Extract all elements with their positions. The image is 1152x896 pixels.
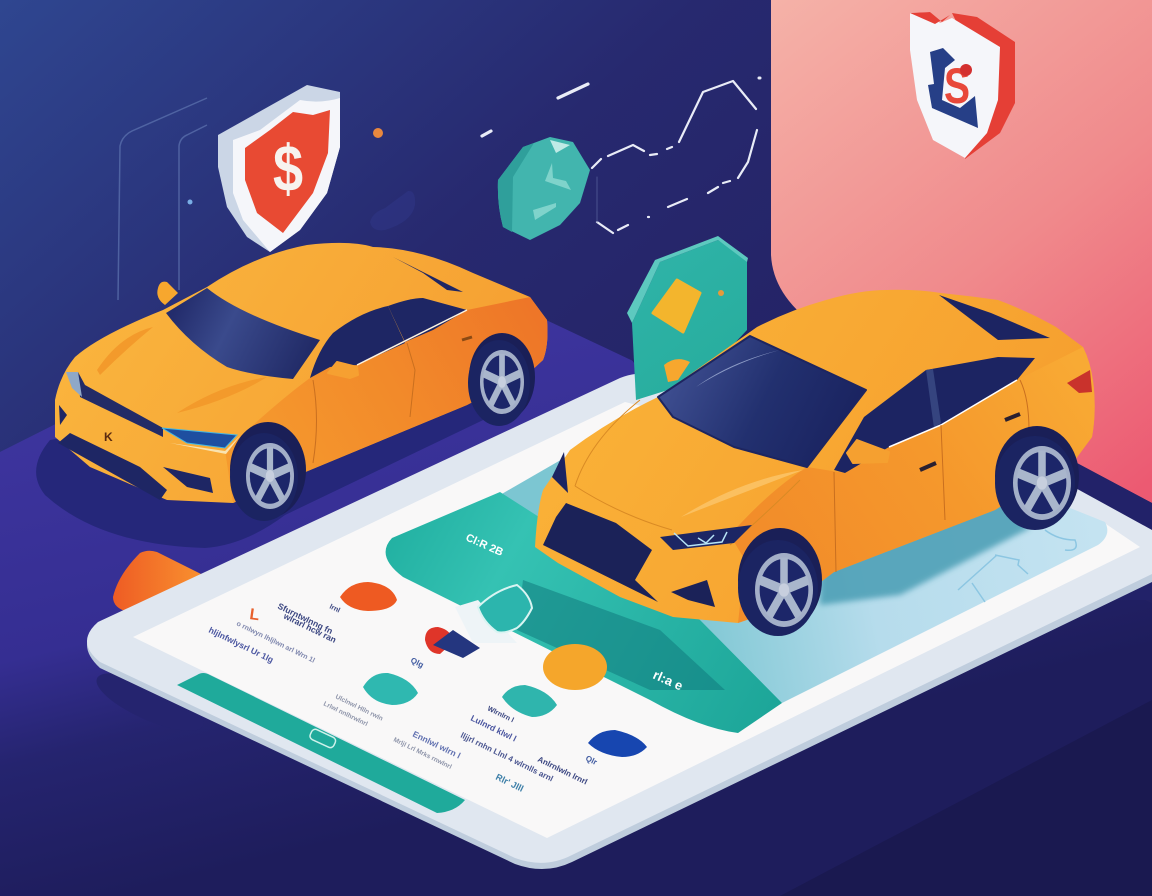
list text: Anlrnlwln lrnrl [536,755,589,787]
teal hexagon badge [498,137,590,240]
icon: red pill [340,582,397,611]
side window rear [388,298,467,342]
rear strip [393,257,463,292]
tag body [632,240,747,400]
list text: Qlr [584,754,598,767]
icon: teal pill a [363,673,418,705]
star dot [718,290,724,296]
window sill [357,310,467,365]
headlight [660,525,752,550]
window sill [889,380,1017,447]
door handles [920,414,1020,470]
icon: blue badge [588,730,647,757]
teal reflection [517,580,725,690]
grille [543,503,658,602]
faint blob [370,191,415,230]
line chart dashes [482,78,760,233]
shield white face [910,12,1000,158]
list text: Mrljl Lrl Mrks rnwlnrl [392,737,453,771]
windshield [166,288,320,379]
icon: glass shield [455,585,532,643]
list text: lrnl [328,604,341,615]
tablet screen [133,402,1140,838]
list text: Lrlwl nnlhrwlnrl [322,701,369,728]
tablet [87,373,1152,869]
door lines [834,380,1029,572]
shield red tip [910,12,950,24]
shield front [233,98,340,252]
left headlight [552,452,568,493]
shield left [218,85,340,252]
logo knob [960,64,972,76]
grille strip [78,372,163,437]
list text: hljlnfwlysrl Ur 1lg [207,625,275,665]
door lines [313,343,415,463]
list text: o rnlwyn lhljlwn arl Wrn 1l [235,621,316,665]
teal panel [386,492,782,733]
logo S: S [944,57,970,114]
side panel [225,297,548,503]
lower grille [58,433,167,500]
front wheel arch [738,528,822,632]
front wheel [738,540,818,636]
front wheel arch [230,422,306,518]
left car shadow [36,370,525,548]
headlight lights [674,532,727,546]
windshield [658,336,866,467]
rear wheel [995,436,1075,530]
letter mark: L [248,606,261,624]
rear wheel arch [469,333,535,421]
tablet shadow [90,662,210,742]
home button [309,728,337,749]
tablet body [87,373,1152,863]
door handle [462,337,472,340]
side vent [59,405,67,425]
navy floor behind tablet right [632,315,1152,600]
gold icon [653,280,700,332]
tag edge [627,236,748,323]
side window front [310,306,405,378]
floor lower-right shade [780,700,1152,896]
dollar sign: $ [273,131,303,205]
shield red face [245,110,330,233]
right car shadow [820,490,1030,605]
rear wheel arch [995,426,1079,526]
list text: Ennlwl wlrn l [411,729,462,761]
shield back [218,85,340,252]
mirror [847,440,889,463]
icon: teal pill b [502,685,557,717]
fog lamp [671,580,715,607]
dots [188,128,383,204]
map lines [958,530,1076,602]
left car [55,243,548,521]
hood creases [97,327,267,413]
list text: Qlg [409,656,425,670]
windshield glare [696,350,780,387]
logo navy [928,48,978,128]
side panel [730,347,1095,623]
list text: Lulnrd klwl l [469,713,518,744]
teal tag behind car [627,236,748,400]
far mirror [157,282,178,305]
fog lamp [163,467,213,493]
teal lower text: rl:a e [651,667,685,693]
pillar [926,369,941,428]
list text [207,601,598,794]
headlight [162,428,237,448]
tablet lip [87,376,1152,869]
shield red back [952,13,1015,159]
logo: K [104,430,113,444]
list text: lljjrl rnhn Llnl 4 wlrnlls arnl [459,731,555,783]
mirror [328,362,358,378]
far mirror [664,359,690,382]
icon: orange circle [543,644,607,690]
floor [0,251,1152,896]
icon: red navy badge [425,627,480,658]
shield right [910,12,1015,159]
front wheel [230,433,298,521]
body [55,243,548,503]
hood line [575,400,800,545]
side window [834,357,1035,473]
list text: Rlr' Jlll [494,772,525,794]
map tray [500,420,1107,703]
body [535,290,1095,623]
left headlight [66,372,82,397]
list text: Ulclnwl Hlln rwln [334,694,384,723]
rear strip [939,295,1050,340]
teal bottom bar [177,673,465,813]
rear light [1067,370,1092,393]
list text: wlrarl hcw ran [281,610,338,645]
hood crease [681,470,803,517]
orange tag [113,551,203,612]
headlight trim [170,436,240,454]
right car [535,290,1095,636]
pink wall panel [771,0,1152,503]
rear wheel [468,340,530,426]
list text: Sfurntwlnng fn [276,601,334,636]
teal header text: Cl:R 2B [464,532,505,559]
list text: Wlrnlrn l [486,706,515,724]
glass frame lines [118,98,207,300]
